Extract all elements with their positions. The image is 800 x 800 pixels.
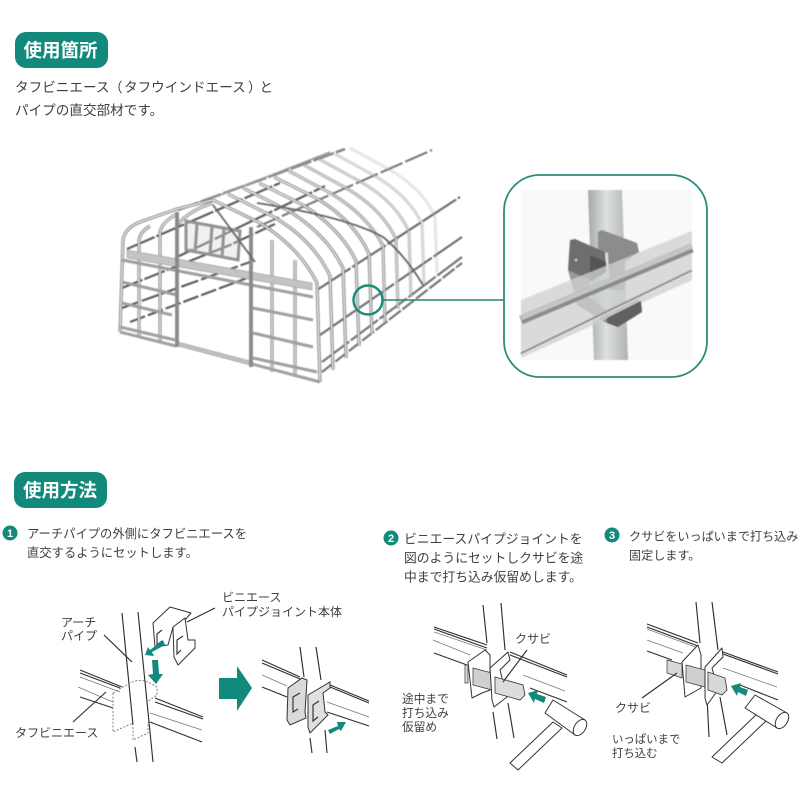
green note: [402, 692, 449, 734]
green arrow: [328, 722, 346, 734]
greenhouse frame illustration: [120, 148, 462, 382]
intro text: [15, 80, 273, 118]
step 2 text: 中まで打ち込み仮留めします。: [404, 570, 582, 584]
left plate: [468, 650, 490, 698]
wedge left end: [465, 665, 468, 683]
rail lower edge: [521, 271, 692, 354]
door posts: [177, 212, 251, 367]
leader line to detail panel: [383, 299, 505, 301]
door sill: [178, 342, 250, 365]
intro text: タフビニエース: [15, 80, 109, 95]
photo contents: [521, 190, 692, 360]
rail round tube: [521, 248, 692, 320]
label: tough vinyl ace: タフビニエース: [15, 726, 98, 740]
green note: いっぱいまで: [612, 733, 680, 746]
label: arch pipe: パイプ: [61, 629, 97, 643]
step 3 text: クサビをいっぱいまで打ち込み: [629, 530, 798, 544]
number badge 3: 3: [609, 530, 615, 542]
heading badge: 使用方法: 使用方法: [23, 480, 98, 501]
arch pipes: [120, 148, 437, 382]
diagram: step 1 before: [15, 590, 342, 762]
wedge: [473, 668, 492, 690]
wedge middle: [686, 665, 705, 687]
arrow: next state: [219, 666, 252, 711]
intro text: と: [260, 80, 273, 95]
label: joint body: ビニエース: [222, 590, 281, 604]
diagonal braces: [213, 203, 423, 285]
number badge 2: 2: [388, 533, 394, 545]
roof and side purlins: [122, 149, 462, 372]
label: wedge: [615, 673, 677, 715]
right plate: [490, 652, 510, 707]
green note: 途中まで: [402, 692, 449, 706]
heading badge: 使用方法: [14, 472, 107, 508]
panel: joint close-up: [504, 175, 707, 377]
label: joint body: [187, 590, 342, 622]
left plate: [682, 645, 701, 697]
heading badge: 使用箇所: 使用箇所: [24, 40, 98, 61]
heading badge: 使用箇所: [15, 32, 108, 68]
label: arch pipe: [61, 616, 132, 662]
slots: [293, 693, 319, 721]
joint lower bracket front: [607, 301, 642, 327]
rail lines: [78, 670, 203, 742]
right plate: [705, 648, 723, 705]
wedge right end: [495, 677, 525, 700]
photo background: [521, 190, 692, 360]
window frame: [186, 221, 240, 260]
intro text: ）: [248, 80, 262, 95]
number badge 1: [2, 526, 18, 540]
number badge 3: [604, 528, 620, 542]
diagram: step 1 after: [262, 647, 369, 753]
label: wedge: クサビ: [615, 701, 651, 715]
detail callout circle: [354, 286, 382, 314]
step 2 text: [384, 530, 583, 584]
arch pipe lines: [122, 612, 153, 762]
dashed joint position: [113, 680, 157, 740]
joint lower bracket: [575, 297, 642, 327]
top beam band: [127, 250, 312, 290]
green arrows: [145, 640, 165, 684]
diagram: step 3: [612, 602, 792, 763]
wedge left end: [667, 660, 682, 678]
green arrow: [731, 683, 748, 696]
label: tough vinyl ace: [15, 692, 106, 740]
green note: 打ち込む: [612, 746, 658, 760]
number badge 2: [384, 530, 398, 546]
left plate: [287, 678, 307, 725]
step 1 text: [2, 526, 247, 560]
front wall rails: [120, 260, 320, 382]
green arrow: [528, 690, 546, 703]
green note: [612, 733, 680, 760]
joint right plate: [598, 230, 639, 267]
green note: 打ち込み: [402, 706, 449, 720]
joint lower edge: [568, 270, 590, 292]
intro text: タフウインドエース: [124, 80, 246, 95]
step 3 text: 固定します。: [629, 548, 700, 562]
intro text: パイプの直交部材です。: [15, 103, 163, 118]
hammer: [510, 700, 590, 770]
green note: 仮留め: [402, 721, 437, 734]
step 1 text: 直交するようにセットします。: [27, 545, 198, 560]
joint body: [153, 607, 195, 665]
hammer: [712, 695, 792, 763]
rail body: [521, 231, 692, 358]
vertical pipe: [588, 190, 628, 360]
wedge right end: [708, 672, 727, 695]
intro text: （: [109, 80, 123, 95]
step 2 text: 図のようにセットしクサビを途: [404, 550, 583, 566]
label: joint body: パイプジョイント本体: [222, 605, 342, 619]
number badge 1: 1: [7, 528, 13, 540]
label: arch pipe: アーチ: [61, 616, 96, 630]
label: wedge: クサビ: [515, 632, 551, 646]
diagram: step 2: [402, 603, 590, 770]
label: wedge: [503, 632, 551, 682]
joint left plate: [568, 239, 606, 283]
step 3 text: [604, 528, 798, 562]
step 1 text: アーチパイプの外側にタフビニエースを: [27, 527, 247, 541]
step 2 text: ビニエースパイプジョイントを: [404, 532, 583, 546]
right plate: [308, 682, 330, 733]
